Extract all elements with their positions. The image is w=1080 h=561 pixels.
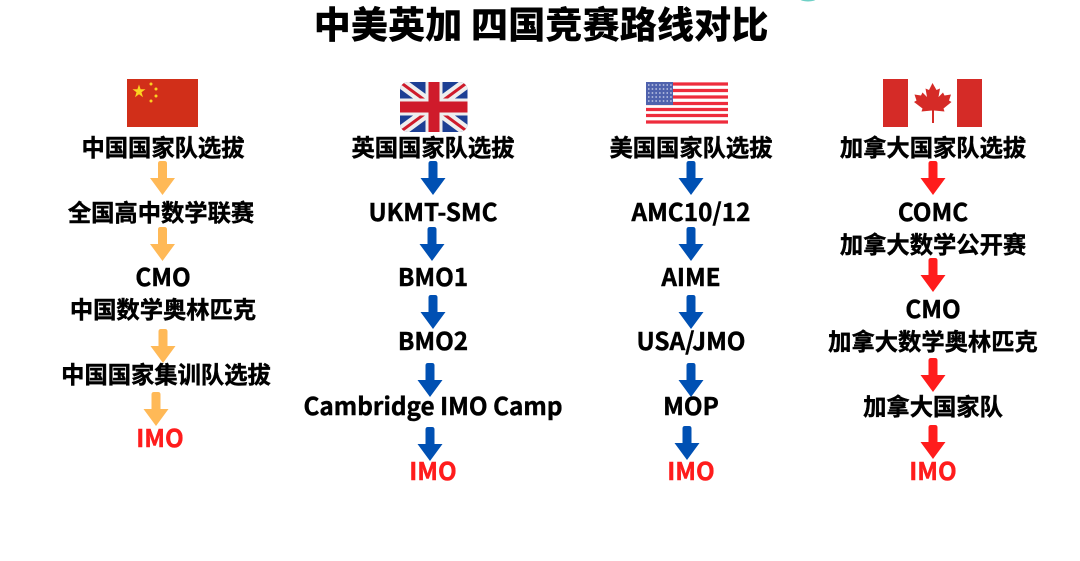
step: CMO: CMO	[135, 258, 191, 293]
step: 加拿大国家队: 加拿大国家队	[863, 388, 1003, 422]
step: 美国国家队选拔: 美国国家队选拔	[609, 129, 773, 163]
icon: Canada flag	[883, 79, 982, 127]
step: 全国高中数学联赛: 全国高中数学联赛	[68, 194, 254, 228]
step: 英国国家队选拔: 英国国家队选拔	[351, 129, 515, 163]
step: 中国数学奥林匹克: 中国数学奥林匹克	[70, 291, 256, 325]
arrow	[920, 425, 946, 459]
arrow	[420, 295, 446, 329]
arrow	[150, 227, 175, 261]
step: MOP: MOP	[663, 387, 719, 422]
column: Canada route	[828, 79, 1038, 487]
arrow	[678, 295, 704, 329]
arrow	[678, 227, 704, 261]
step: AMC10/12: AMC10/12	[631, 193, 750, 228]
arrow	[678, 363, 704, 397]
arrow	[144, 392, 168, 426]
column: UK route	[303, 82, 563, 487]
step: CMO: CMO	[905, 290, 961, 325]
step: IMO: IMO	[136, 419, 184, 454]
arrow	[150, 329, 176, 363]
step: 加拿大国家队选拔: 加拿大国家队选拔	[840, 129, 1026, 163]
step: 加拿大数学公开赛: 加拿大数学公开赛	[840, 226, 1026, 260]
step: 中国国家队选拔: 中国国家队选拔	[81, 129, 245, 163]
arrow	[420, 227, 444, 261]
arrow	[920, 161, 946, 195]
step: USA/JMO: USA/JMO	[636, 322, 746, 357]
arrow	[674, 426, 700, 460]
step: BMO1: BMO1	[398, 258, 468, 293]
arrow	[150, 161, 175, 195]
step: 加拿大数学奥林匹克: 加拿大数学奥林匹克	[828, 323, 1038, 357]
step: Cambridge IMO Camp: Cambridge IMO Camp	[303, 387, 563, 422]
step: COMC: COMC	[898, 193, 968, 228]
arrow	[420, 161, 446, 195]
step: 中国国家集训队选拔: 中国国家集训队选拔	[61, 356, 271, 390]
step: IMO: IMO	[667, 452, 715, 487]
arrow	[418, 427, 442, 461]
icon: China flag	[127, 79, 198, 127]
arrow	[920, 258, 946, 292]
step: BMO2: BMO2	[398, 322, 468, 357]
step: AIME: AIME	[660, 258, 721, 293]
arrow	[920, 358, 946, 392]
step: UKMT-SMC: UKMT-SMC	[368, 193, 498, 228]
column: US route	[609, 82, 773, 487]
column: China route	[61, 79, 271, 454]
icon: UK flag	[400, 82, 468, 132]
icon: US flag	[646, 82, 728, 124]
step: IMO: IMO	[909, 452, 957, 487]
arrow	[678, 161, 704, 195]
arrow	[418, 363, 442, 397]
step: IMO: IMO	[409, 452, 457, 487]
